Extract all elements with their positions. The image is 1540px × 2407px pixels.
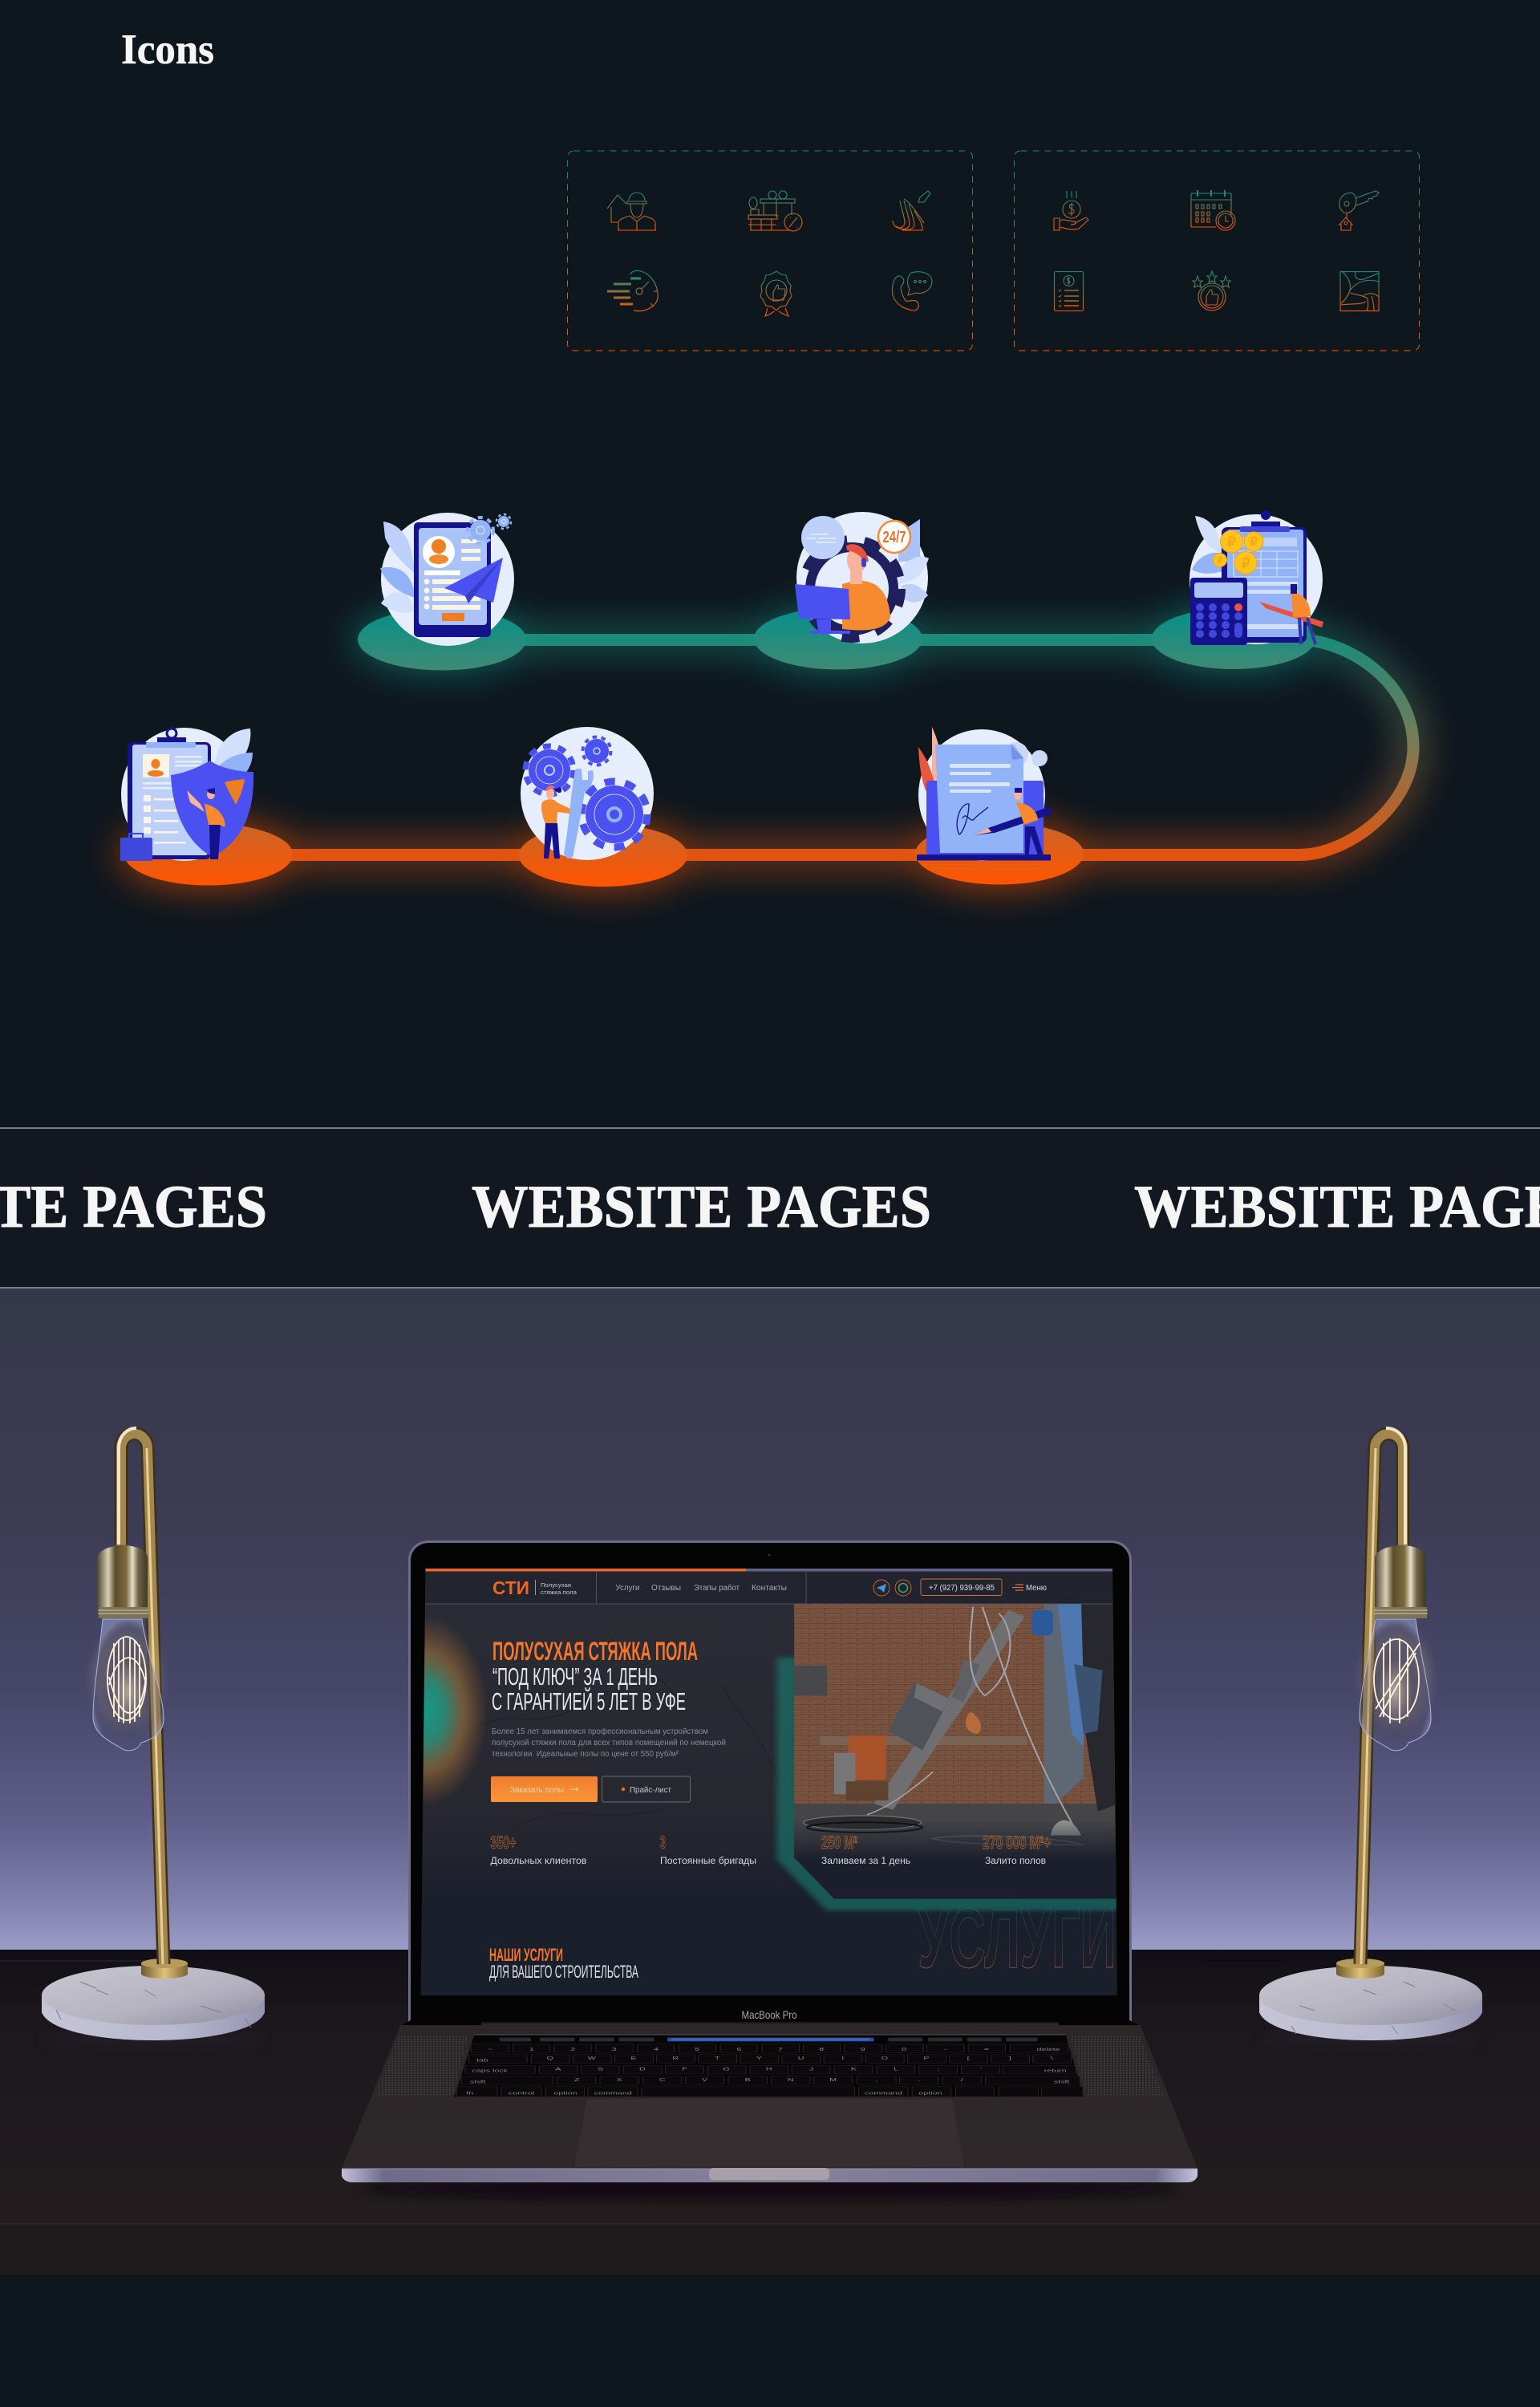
screen: navigation: Контакты <box>752 1584 787 1593</box>
keyboard labels: I <box>841 2056 844 2060</box>
lamp: left <box>0 1428 265 2048</box>
icon: builder and house <box>607 193 656 230</box>
keyboard labels: T <box>715 2056 720 2060</box>
screen: hero heading <box>492 1642 698 1711</box>
keyboard labels: return <box>1044 2068 1067 2073</box>
laptop: base <box>342 2023 1198 2182</box>
icon: key and house <box>1339 191 1379 230</box>
keyboard labels: 3 <box>612 2047 617 2052</box>
keyboard labels: B <box>745 2077 751 2082</box>
screen: description <box>492 1727 726 1759</box>
illustration: budget calculator: ₽ <box>1242 556 1250 571</box>
laptop: model label: MacBook Pro <box>741 2008 797 2021</box>
screen: description: Более 15 лет занимаемся профессиональным устройством <box>492 1727 708 1736</box>
keyboard labels: Q <box>547 2056 554 2060</box>
screen: social icons <box>873 1580 911 1596</box>
keyboard labels: Z <box>574 2077 580 2082</box>
icon: rating stars and thumb <box>1193 271 1230 311</box>
keyboard labels: L <box>894 2067 899 2072</box>
icon: speedometer <box>607 270 658 311</box>
screen: logo: СТИ <box>492 1577 529 1598</box>
screen: price button: Прайс-лист <box>630 1786 671 1795</box>
screen: navigation: Услуги <box>616 1584 640 1593</box>
panel: desk <box>0 1950 1540 2275</box>
screen: menu <box>1012 1584 1047 1591</box>
screen: logo: стяжка пола <box>541 1589 578 1596</box>
screen: statistics: 250 М² <box>821 1833 857 1853</box>
illustration: application on phone <box>380 513 514 646</box>
keyboard labels: 8 <box>819 2047 825 2052</box>
keyboard labels: control <box>509 2091 534 2096</box>
screen: menu: Меню <box>1026 1584 1047 1593</box>
keyboard labels: E <box>630 2056 637 2060</box>
keyboard labels: 4 <box>654 2047 659 2052</box>
screen: phone button <box>921 1579 1002 1595</box>
keyboard labels: 7 <box>778 2047 783 2052</box>
keyboard labels: \ <box>1051 2056 1054 2060</box>
illustration: support agent <box>795 512 929 643</box>
laptop: front notch <box>709 2168 829 2180</box>
keyboard labels: - <box>944 2047 947 2052</box>
screen: navigation: Отзывы <box>651 1584 681 1593</box>
route nodes <box>124 608 1315 887</box>
screen: services heading: НАШИ УСЛУГИ <box>489 1945 563 1965</box>
screen: description: полусухой стяжки пола для всех типов помещений по немецкой <box>492 1739 726 1747</box>
screen: description: технологии. Идеальные полы по цене от 550 руб/м² <box>492 1749 679 1759</box>
icon: price list document <box>1054 271 1083 311</box>
keyboard labels: ' <box>980 2067 982 2072</box>
icon: calendar and clock <box>1191 190 1235 230</box>
keyboard labels: 5 <box>695 2047 700 2052</box>
laptop: shadow <box>361 2178 1179 2200</box>
laptop: keyboard <box>454 2035 1084 2096</box>
keyboard labels: option <box>918 2091 942 2096</box>
keyboard labels: 6 <box>736 2047 742 2052</box>
keyboard labels: 2 <box>570 2047 576 2052</box>
icon: gifts and discount <box>748 191 802 231</box>
icon: award badge <box>760 271 792 316</box>
keyboard labels: D <box>639 2067 646 2072</box>
screen: services heading <box>489 1948 638 1982</box>
icon: cracked floor <box>1340 271 1379 311</box>
keyboard labels: A <box>555 2067 561 2072</box>
screen: hero heading: “ПОД КЛЮЧ” ЗА 1 ДЕНЬ <box>492 1662 658 1691</box>
keyboard labels: X <box>617 2077 622 2082</box>
screen: services heading: ДЛЯ ВАШЕГО СТРОИТЕЛЬСТВА <box>489 1962 638 1982</box>
screen: logo <box>492 1580 578 1595</box>
keyboard labels: shift <box>470 2080 486 2084</box>
screen: hero photo <box>794 1604 1119 1901</box>
screen: statistics: 350+ <box>491 1833 517 1853</box>
keyboard labels: , <box>875 2077 877 2082</box>
screen: statistics: Залито полов <box>985 1857 1046 1866</box>
keyboard labels: 0 <box>902 2047 907 2052</box>
keyboard labels: Y <box>756 2056 763 2060</box>
screen: navigation: Этапы работ <box>694 1583 740 1593</box>
title: Icons: Icons <box>121 26 214 73</box>
icon: plastering trowel <box>893 191 930 230</box>
panel: icon set one <box>568 151 972 351</box>
screen: navigation <box>616 1584 786 1592</box>
keyboard labels: N <box>788 2077 794 2082</box>
screen: logo: Полусухая <box>541 1581 571 1589</box>
keyboard labels: 1 <box>529 2047 534 2052</box>
screen: statistics <box>491 1836 1051 1866</box>
route glow <box>118 603 1413 892</box>
keyboard labels: M <box>829 2077 837 2082</box>
route path <box>209 640 1413 855</box>
screen: header bar <box>417 1569 1123 1604</box>
keyboard labels: S <box>598 2067 604 2072</box>
illustration: budget calculator <box>1189 510 1323 645</box>
lamp: right <box>1203 1428 1483 2048</box>
keyboard labels: O <box>881 2056 889 2060</box>
keyboard labels: W <box>588 2056 596 2060</box>
keyboard labels: [ <box>967 2056 971 2060</box>
keyboard labels: 9 <box>861 2047 865 2052</box>
keyboard labels: ] <box>1009 2056 1011 2060</box>
keyboard labels: ; <box>938 2067 940 2072</box>
keyboard labels: caps lock <box>472 2068 509 2073</box>
keyboard labels: = <box>984 2047 989 2052</box>
keyboard labels: . <box>918 2077 920 2082</box>
screen: statistics: Постоянные бригады <box>660 1857 756 1866</box>
heading: scrolling text <box>0 1174 1540 1240</box>
illustration: budget calculator: ₽ <box>1227 534 1236 550</box>
illustration: budget calculator: ₽ <box>1218 556 1222 566</box>
screen: statistics: 3 <box>660 1833 666 1853</box>
keyboard labels: command <box>594 2091 632 2096</box>
laptop: lid <box>401 1540 1140 2025</box>
screen: hero heading: С ГАРАНТИЕЙ 5 ЛЕТ В УФЕ <box>492 1687 686 1715</box>
panel: room wall <box>0 1289 1540 1950</box>
keyboard labels: P <box>923 2056 930 2060</box>
laptop: trackpad <box>574 2099 964 2166</box>
keyboard labels: tab <box>476 2058 488 2063</box>
keyboard labels: K <box>851 2067 857 2072</box>
screen: statistics: Довольных клиентов <box>491 1857 587 1866</box>
screen: hero heading: ПОЛУСУХАЯ СТЯЖКА ПОЛА <box>492 1637 698 1666</box>
keyboard labels: shift <box>1054 2080 1070 2084</box>
keyboard labels: V <box>702 2077 708 2082</box>
screen: statistics: 270 000 М²+ <box>983 1833 1051 1853</box>
keyboard labels: delete <box>1037 2047 1060 2052</box>
screen: hero panel <box>422 1605 794 1884</box>
screen: outlined word: УСЛУГИ <box>918 1891 1116 1986</box>
screen: order button: Заказать полы <box>510 1786 564 1795</box>
screen: phone button: +7 (927) 939-99-85 <box>929 1584 995 1593</box>
icon: coin on hand <box>1054 191 1088 230</box>
keyboard labels: C <box>659 2077 666 2082</box>
icon: phone with chat bubble <box>892 272 932 311</box>
keyboard labels: G <box>723 2067 730 2072</box>
illustration: resume and shield <box>120 728 253 861</box>
illustration: support agent: 24/7 <box>882 529 906 546</box>
screen: photo glow <box>787 1658 1121 1904</box>
illustration: contract signature <box>917 727 1051 861</box>
illustration: budget calculator: ₽ <box>1250 535 1258 549</box>
website screen <box>363 1569 1123 1995</box>
keyboard labels: option <box>553 2091 578 2096</box>
panel: icon set two <box>1014 151 1420 351</box>
keyboard labels: fn <box>466 2091 474 2096</box>
keyboard labels: F <box>682 2067 687 2072</box>
screen: order button <box>491 1776 598 1802</box>
keyboard labels: command <box>865 2091 902 2096</box>
keyboard labels: U <box>798 2056 804 2060</box>
laptop: speaker grilles <box>375 2036 1164 2096</box>
keyboard labels: H <box>766 2067 772 2072</box>
keyboard labels: R <box>672 2056 679 2060</box>
section band: website pages <box>0 1128 1540 1289</box>
keyboard labels: J <box>809 2067 813 2072</box>
screen: statistics: Заливаем за 1 день <box>821 1857 910 1866</box>
illustration: gears and wrench <box>521 727 654 860</box>
heading: scrolling text: WEBSITE PAGES <box>472 1174 931 1240</box>
keyboard labels: / <box>961 2077 964 2082</box>
keyboard labels: ~ <box>488 2047 492 2052</box>
keyboard labels <box>466 2047 1070 2096</box>
screen: price button <box>602 1776 691 1802</box>
